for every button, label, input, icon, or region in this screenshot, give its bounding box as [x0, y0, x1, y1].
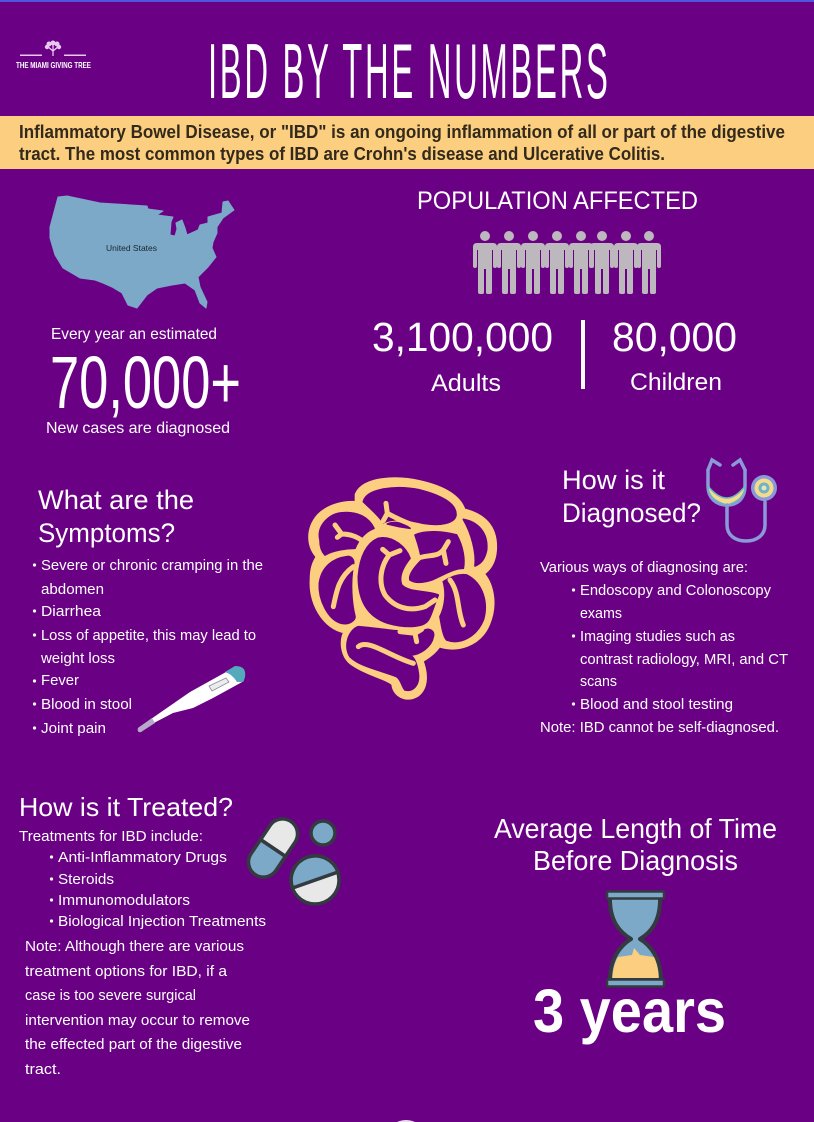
treatment section: tract. [25, 1061, 61, 1078]
definition banner: Inflammatory Bowel Disease, or "IBD" is an ongoing inflammation of all or part of the digestive [19, 122, 785, 142]
symptoms section: Joint pain [41, 720, 106, 737]
treatment section: intervention may occur to remove [25, 1012, 250, 1029]
treatment section: Steroids [58, 871, 114, 888]
treatment section [19, 792, 266, 1078]
population figures: Adults [431, 370, 501, 397]
symptoms section: Diarrhea [41, 603, 102, 620]
logo: The Miami Giving Tree [16, 40, 91, 70]
average time heading: Before Diagnosis [533, 845, 738, 876]
symptoms section: Severe or chronic cramping in the [41, 557, 263, 574]
definition banner [0, 116, 814, 169]
population figures: 3,100,000 [372, 314, 553, 360]
diagnosis text: Various ways of diagnosing are: [540, 559, 748, 576]
icon: stethoscope [708, 460, 777, 541]
diagnosis heading: Diagnosed? [562, 498, 701, 528]
population figures [372, 314, 737, 397]
average time heading [494, 813, 777, 876]
diagnosis text: Endoscopy and Colonoscopy [580, 582, 771, 599]
diagnosis text: Imaging studies such as [580, 628, 735, 645]
symptoms section: weight loss [40, 650, 115, 667]
icon: row of people [473, 231, 661, 294]
diagnosis heading: How is it [562, 465, 666, 495]
new cases stat: Every year an estimated [51, 326, 217, 343]
diagnosis heading [562, 465, 701, 528]
icon: thermometer [138, 666, 245, 732]
logo: The Miami Giving Tree: THE MIAMI GIVING TREE [16, 60, 91, 70]
new cases stat: New cases are diagnosed [46, 420, 230, 437]
US map: United States [106, 243, 157, 253]
icon: intestines [312, 481, 493, 696]
new cases stat: 70,000+ [50, 341, 241, 424]
treatment section: case is too severe surgical [25, 987, 196, 1004]
population figures: 80,000 [612, 314, 737, 360]
treatment section: Treatments for IBD include: [19, 828, 203, 845]
treatment section: the effected part of the digestive [25, 1036, 242, 1053]
diagnosis text: scans [580, 673, 617, 690]
symptoms section: Loss of appetite, this may lead to [41, 627, 256, 644]
US map [50, 196, 234, 308]
title: IBD BY THE NUMBERS [208, 28, 608, 115]
symptoms section: Fever [41, 672, 79, 689]
duration stat: 3 years [533, 977, 726, 1045]
treatment section: Note: Although there are various [25, 938, 244, 955]
definition banner: tract. The most common types of IBD are Crohn's disease and Ulcerative Colitis. [19, 144, 665, 164]
treatment section: Anti-Inflammatory Drugs [58, 849, 227, 866]
average time heading: Average Length of Time [494, 813, 777, 844]
symptoms section [33, 485, 263, 737]
symptoms section: Blood in stool [41, 696, 132, 713]
diagnosis text [540, 559, 788, 736]
treatment section: How is it Treated? [19, 792, 233, 822]
diagnosis text: exams [580, 605, 622, 622]
symptoms section: What are the [38, 485, 194, 515]
population affected heading: POPULATION AFFECTED [417, 187, 698, 215]
symptoms section: abdomen [41, 581, 104, 598]
icon: pills [243, 813, 339, 904]
diagnosis text: Blood and stool testing [580, 696, 733, 713]
treatment section: Biological Injection Treatments [58, 913, 266, 930]
bottom edge mark [397, 1120, 415, 1122]
symptoms section: Symptoms? [38, 518, 175, 548]
diagnosis text: contrast radiology, MRI, and CT [580, 651, 788, 668]
population figures: Children [630, 369, 722, 396]
new cases stat [46, 326, 241, 437]
diagnosis text: Note: IBD cannot be self-diagnosed. [540, 719, 779, 736]
icon: hourglass [607, 892, 664, 986]
treatment section: Immunomodulators [58, 892, 190, 909]
treatment section: treatment options for IBD, if a [25, 963, 228, 980]
